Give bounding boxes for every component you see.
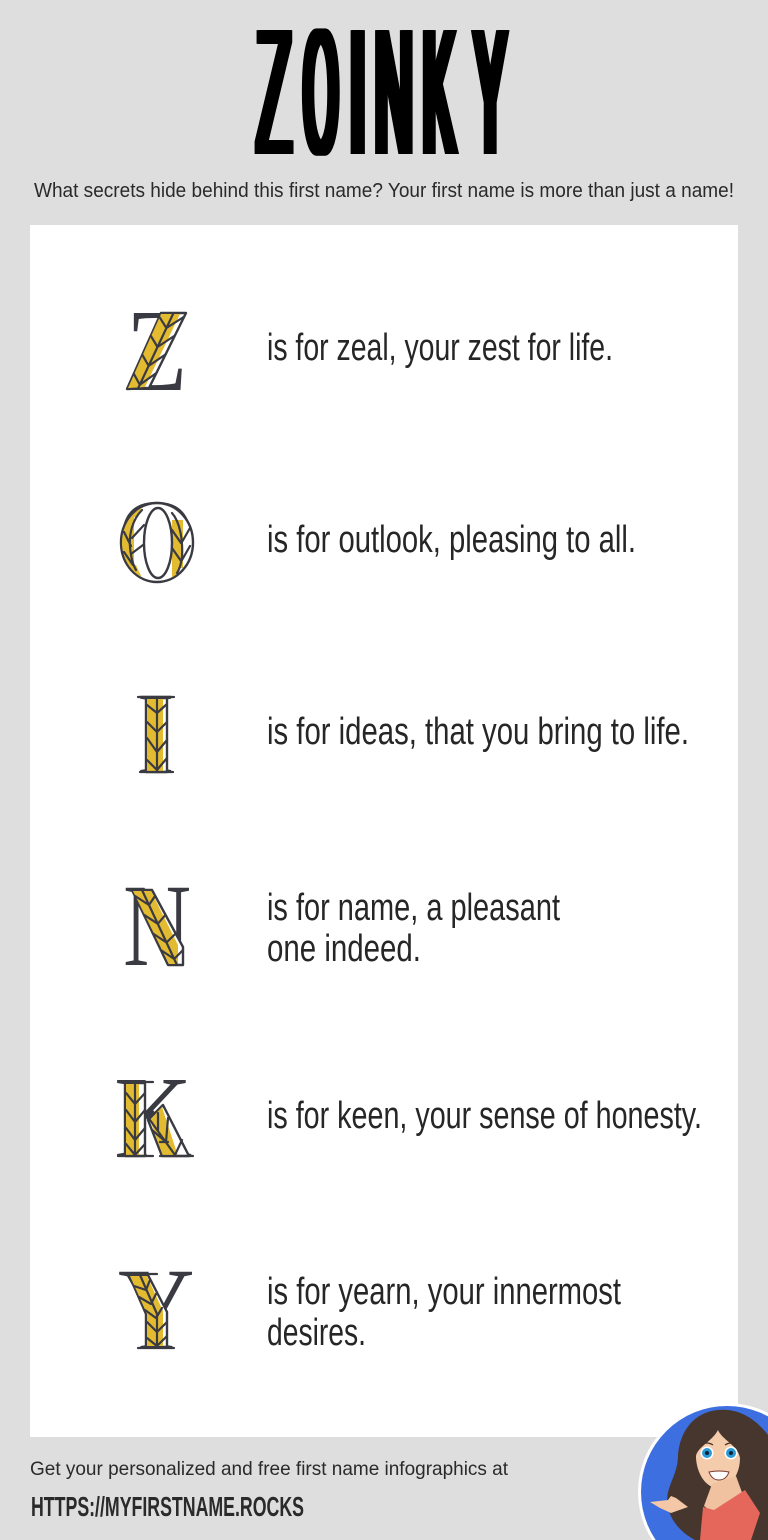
icon: letter K: K bbox=[114, 1052, 192, 1183]
icon: letter I: I bbox=[136, 668, 175, 799]
panel: letters bbox=[30, 225, 738, 1437]
footer text: Get your personalized and free first name infographics at bbox=[30, 1458, 509, 1480]
icon: letter O bbox=[120, 502, 194, 584]
title bbox=[254, 0, 510, 193]
icon: letter Z: Z bbox=[126, 284, 187, 416]
subtitle: What secrets hide behind this first name? Your first name is more than just a name! bbox=[34, 180, 734, 202]
text: Y lines: desires. bbox=[267, 1312, 366, 1354]
icon: letter N: N bbox=[123, 861, 191, 992]
text: Z line: is for zeal, your zest for life. bbox=[267, 327, 613, 369]
footer url: HTTPS://MYFIRSTNAME.ROCKS bbox=[31, 1491, 304, 1522]
avatar bbox=[638, 1403, 768, 1540]
text: N lines: one indeed. bbox=[267, 928, 421, 970]
text: Y lines: is for yearn, your innermost bbox=[267, 1271, 621, 1313]
icon: letter O: O bbox=[117, 474, 196, 606]
text: N lines: is for name, a pleasant bbox=[267, 887, 560, 929]
icon: letter Y: Y bbox=[118, 1245, 195, 1375]
text: O line: is for outlook, pleasing to all. bbox=[267, 519, 636, 561]
